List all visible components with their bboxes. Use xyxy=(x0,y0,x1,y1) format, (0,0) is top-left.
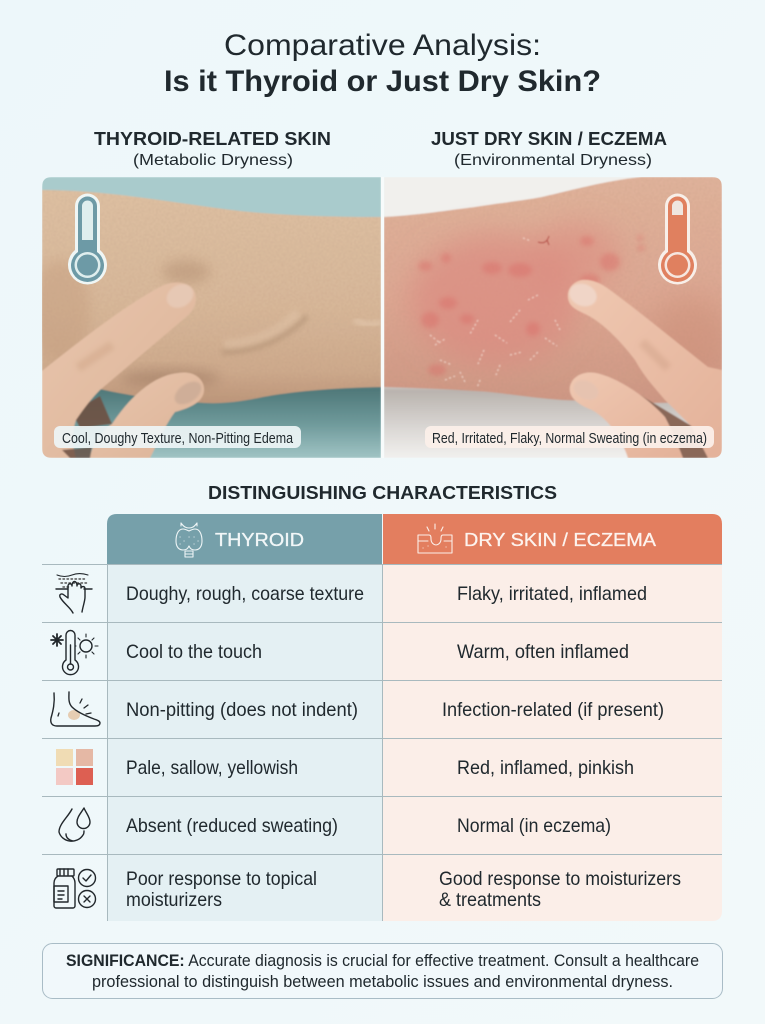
fingernails xyxy=(166,284,194,308)
row: treatment response xyxy=(54,868,681,911)
forearm xyxy=(42,190,381,403)
shadow between fingers xyxy=(644,397,708,458)
row: texture: Doughy, rough, coarse texture xyxy=(126,583,364,605)
header: thyroid xyxy=(107,514,382,565)
row: sweating: Absent (reduced sweating) xyxy=(126,815,338,837)
significance callout: professional to distinguish between metabolic issues and environmental dryness. xyxy=(92,972,673,991)
divider between photos xyxy=(381,177,384,458)
eczema patches xyxy=(410,223,620,365)
icon: colour swatches xyxy=(56,749,93,785)
column: thyroid background xyxy=(107,565,382,921)
significance callout xyxy=(42,944,722,998)
row: temperature: Cool to the touch xyxy=(126,641,262,663)
heading: thyroid-related skin: (Metabolic Dryness) xyxy=(133,152,293,169)
icon: thyroid gland xyxy=(176,523,202,557)
header: thyroid: THYROID xyxy=(215,529,304,550)
row: treatment response: Poor response to topical xyxy=(126,868,317,890)
row: sweating: Normal (in eczema) xyxy=(457,815,611,837)
photo panel: eczema arm xyxy=(384,177,730,458)
heading: thyroid-related skin: THYROID-RELATED SKIN xyxy=(94,128,331,149)
significance callout: SIGNIFICANCE: Accurate diagnosis is crucial for effective treatment. Consult a healthcare xyxy=(66,951,699,970)
forearm xyxy=(384,177,722,403)
row: edema xyxy=(51,692,664,726)
header: dry skin / eczema: DRY SKIN / ECZEMA xyxy=(464,529,657,550)
row: treatment response: & treatments xyxy=(439,889,541,911)
icon: water drops xyxy=(59,808,90,841)
row: texture xyxy=(56,574,647,613)
title: Comparative Analysis: xyxy=(224,29,541,62)
title: Is it Thyroid or Just Dry Skin? xyxy=(164,65,601,98)
row: temperature xyxy=(51,631,629,675)
caption: thyroid photo: Cool, Doughy Texture, Non-Pitting Edema xyxy=(62,431,294,447)
icon: warm thermometer xyxy=(658,194,697,284)
row: treatment response: moisturizers xyxy=(126,889,222,911)
row: treatment response: Good response to moisturizers xyxy=(439,868,681,890)
flakes xyxy=(430,238,561,388)
icon: skin layers xyxy=(418,524,452,553)
heading: just dry skin / eczema: (Environmental Dryness) xyxy=(454,152,652,169)
row: colour xyxy=(56,749,634,785)
icon: foot xyxy=(51,692,100,726)
lower finger xyxy=(570,373,683,458)
section heading: DISTINGUISHING CHARACTERISTICS xyxy=(208,482,557,503)
row: colour: Pale, sallow, yellowish xyxy=(126,757,298,779)
heading: just dry skin / eczema xyxy=(431,128,667,169)
index finger and palm xyxy=(568,280,722,458)
heading: just dry skin / eczema: JUST DRY SKIN / ECZEMA xyxy=(431,128,667,149)
caption: eczema photo xyxy=(425,426,714,448)
row: colour: Red, inflamed, pinkish xyxy=(457,757,634,779)
hand and index finger xyxy=(42,283,196,458)
icon: snowflake, thermometer, sun xyxy=(51,631,98,675)
fingernails xyxy=(569,284,597,307)
shadow between fingers xyxy=(76,396,112,426)
icon: cool thermometer xyxy=(68,194,107,284)
row: edema: Infection-related (if present) xyxy=(442,699,664,721)
row: temperature: Warm, often inflamed xyxy=(457,641,629,663)
row: edema: Non-pitting (does not indent) xyxy=(126,699,358,721)
comparison table xyxy=(42,514,722,921)
row: texture: Flaky, irritated, inflamed xyxy=(457,583,647,605)
row: sweating xyxy=(59,808,611,841)
grid lines xyxy=(42,564,722,921)
icon: jar with check and cross xyxy=(54,869,96,908)
title xyxy=(164,29,601,98)
photo panel: thyroid arm xyxy=(30,177,381,458)
heading: thyroid-related skin xyxy=(94,128,331,169)
caption: eczema photo: Red, Irritated, Flaky, Normal Sweating (in eczema) xyxy=(432,431,707,447)
lower finger xyxy=(90,372,204,458)
column: eczema background xyxy=(383,565,722,921)
caption: thyroid photo xyxy=(54,426,301,448)
icon: hand on texture xyxy=(56,574,92,613)
header: dry skin / eczema xyxy=(383,514,722,565)
